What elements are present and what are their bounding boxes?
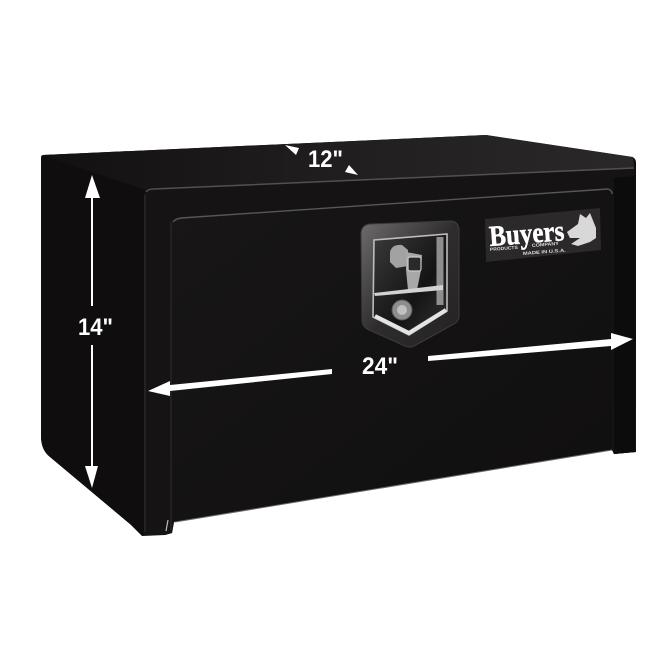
front frame	[144, 168, 636, 535]
well right shine	[436, 237, 444, 305]
handle stem	[406, 252, 422, 290]
depth arrowheads	[285, 145, 299, 155]
made in USA: MADE IN U.S.A.	[523, 248, 566, 256]
dimension: height 14 inches	[78, 175, 113, 488]
brand name: Buyers	[488, 215, 565, 253]
label background	[485, 208, 601, 262]
door left edge	[170, 222, 172, 530]
bolt head	[390, 245, 408, 268]
latch inner well	[373, 234, 447, 335]
door bottom highlight	[175, 450, 612, 522]
brand sub-line: company: COMPANY	[532, 241, 559, 248]
brand sub-line: products: PRODUCTS	[490, 245, 518, 252]
frame top highlight	[146, 168, 634, 192]
icon: bulldog mascot	[567, 213, 596, 246]
dimension: depth 12 inches	[285, 145, 358, 175]
vertical arrow	[85, 175, 100, 488]
brand label: Buyers Products	[485, 208, 601, 262]
right frame post	[614, 176, 635, 454]
depth label: 12"	[308, 146, 343, 173]
left arrow	[148, 369, 332, 396]
door panel	[172, 190, 612, 522]
corner gap	[166, 520, 168, 531]
box silhouette	[41, 135, 636, 536]
dimension: width 24 inches	[148, 333, 633, 396]
height label: 14"	[78, 314, 113, 341]
handle bar	[374, 285, 443, 296]
bolt	[392, 300, 412, 320]
latch outer plate	[361, 221, 459, 347]
frame left highlight	[144, 194, 146, 532]
door top highlight	[173, 189, 612, 222]
tool box body	[41, 135, 636, 536]
top panel	[43, 135, 634, 190]
lock cylinder	[408, 257, 421, 271]
left side panel	[41, 158, 143, 534]
width label: 24"	[362, 353, 398, 380]
right arrow	[428, 333, 633, 361]
latch: chrome T-handle	[361, 221, 459, 347]
well bottom shine	[375, 310, 446, 333]
